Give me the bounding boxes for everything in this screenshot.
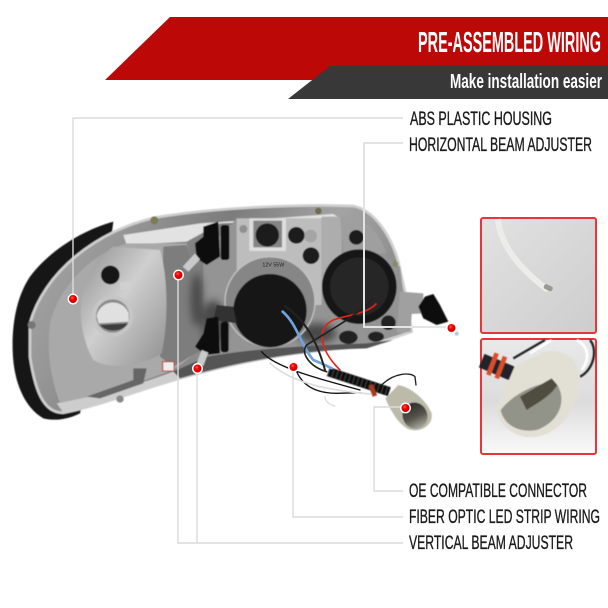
right tab	[397, 292, 423, 333]
black plugs	[288, 227, 305, 244]
dot: housing	[68, 294, 78, 304]
left reflector dome	[81, 247, 166, 366]
wires	[262, 300, 416, 406]
centre plate	[203, 218, 408, 357]
leader: fiber optic wiring	[293, 367, 403, 517]
connector	[385, 385, 432, 430]
main rubber boot	[233, 274, 307, 347]
leader: horizontal beam adjuster	[364, 143, 450, 327]
leader: OE connector	[374, 407, 405, 491]
callout dots	[68, 270, 457, 414]
connector opening	[501, 383, 561, 431]
right rubber boot	[322, 249, 397, 324]
leader: ABS plastic housing	[73, 118, 403, 298]
panel: connector detail photo	[481, 339, 596, 454]
leader: vertical beam adjuster	[178, 275, 403, 543]
wire loom	[328, 372, 389, 392]
connector pins	[520, 378, 557, 410]
dot: fiber optic wiring	[288, 362, 299, 372]
lower dark edge	[173, 340, 393, 378]
callout leader lines	[73, 118, 450, 543]
white wire	[498, 219, 548, 290]
banner: dark subtitle ribbon	[288, 66, 608, 99]
panel: wire detail photo	[481, 218, 596, 333]
dot: connector	[400, 402, 411, 414]
wires	[513, 340, 545, 358]
strip beside dome	[160, 245, 202, 367]
mounting screws	[150, 216, 158, 224]
black outer seal	[13, 222, 113, 420]
wire tip	[543, 283, 553, 292]
dome centre	[92, 295, 133, 337]
dot: upper vertical adjuster	[173, 270, 184, 280]
dark smudges	[191, 273, 337, 347]
bulb surround	[225, 257, 315, 347]
bulb rating text: 12V 55W	[262, 263, 285, 269]
hole	[101, 266, 120, 284]
dot: horizontal adjuster	[446, 322, 457, 334]
connector shell	[497, 351, 580, 437]
adjusters	[195, 222, 448, 355]
lower plugs	[381, 315, 396, 330]
wire loom	[482, 361, 512, 373]
banner: red title ribbon	[105, 17, 608, 80]
top light strip	[123, 214, 340, 245]
housing body	[30, 205, 412, 413]
dot: lower vertical adjuster	[192, 363, 203, 374]
sticker	[163, 362, 174, 371]
headlight illustration	[13, 205, 459, 433]
left reflector lower panel	[49, 243, 200, 403]
adjuster screws	[183, 253, 200, 272]
top socket	[249, 218, 286, 251]
